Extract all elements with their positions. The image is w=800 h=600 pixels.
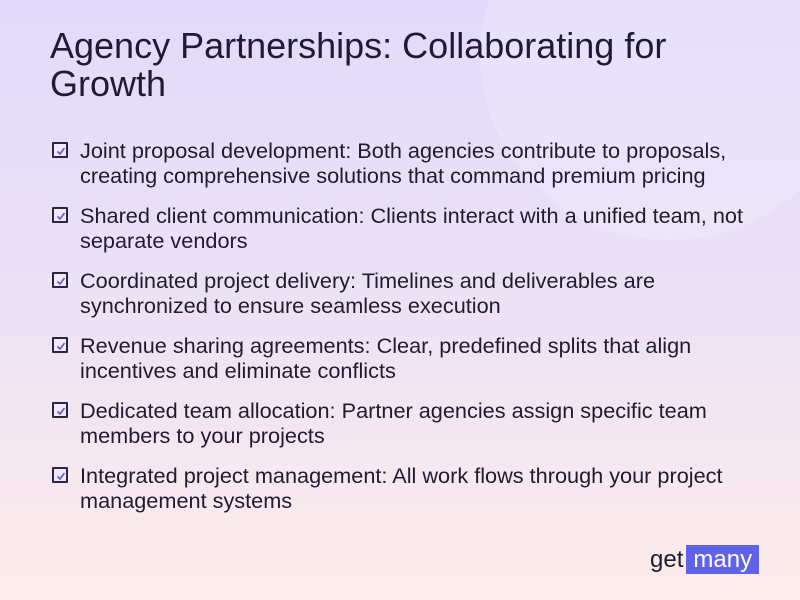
text: Integrated project management: All work flows through your project	[80, 463, 723, 488]
logo: get	[650, 546, 683, 573]
text: Coordinated project delivery: Timelines and deliverables are	[80, 268, 655, 293]
logo	[650, 545, 759, 574]
text	[80, 138, 726, 188]
text	[80, 398, 707, 448]
text: Joint proposal development: Both agencies contribute to proposals,	[80, 138, 726, 163]
text: Shared client communication: Clients interact with a unified team, not	[80, 203, 743, 228]
icon: checkbox	[52, 272, 68, 288]
icon: checkbox	[52, 337, 68, 353]
item 3	[52, 268, 655, 318]
text: synchronized to ensure seamless execution	[80, 293, 501, 318]
text: Dedicated team allocation: Partner agencies assign specific team	[80, 398, 707, 423]
item 4	[52, 333, 691, 383]
icon: checkbox	[52, 467, 68, 483]
text	[80, 463, 723, 513]
text	[80, 203, 743, 253]
text: Revenue sharing agreements: Clear, predefined splits that align	[80, 333, 691, 358]
item 6	[52, 463, 723, 513]
item 2	[52, 203, 743, 253]
logo: many	[693, 546, 752, 573]
title: Agency Partnerships: Collaborating for Growth	[50, 25, 666, 104]
text: incentives and eliminate conflicts	[80, 358, 396, 383]
icon: checkbox	[52, 402, 68, 418]
item 5	[52, 398, 707, 448]
text: members to your projects	[80, 423, 325, 448]
text: separate vendors	[80, 228, 248, 253]
icon: checkbox	[52, 142, 68, 158]
text: management systems	[80, 488, 292, 513]
text	[80, 268, 655, 318]
text	[80, 333, 691, 383]
item 1	[52, 138, 726, 188]
icon: checkbox	[52, 207, 68, 223]
text: creating comprehensive solutions that command premium pricing	[80, 163, 706, 188]
